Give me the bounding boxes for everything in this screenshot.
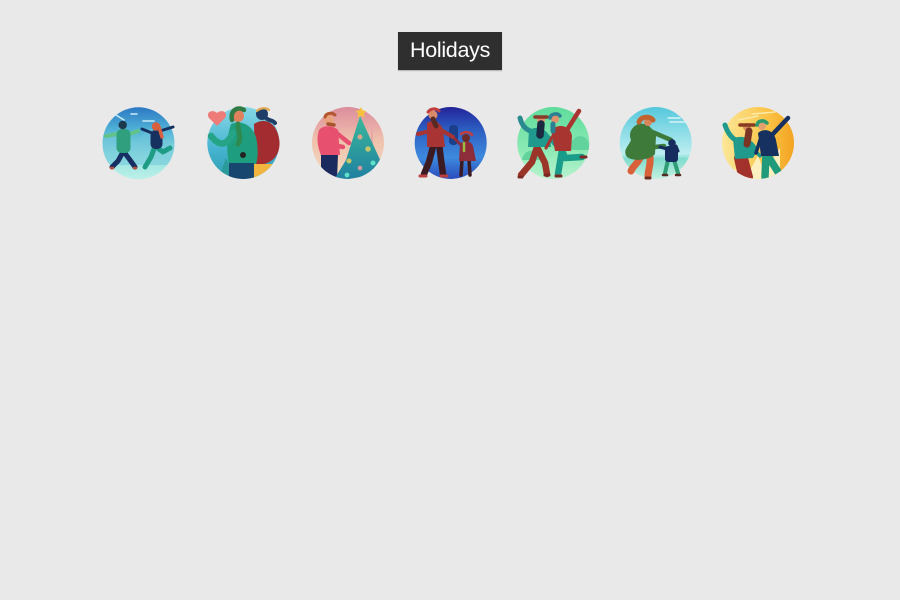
second dancer xyxy=(546,111,586,176)
star xyxy=(356,107,366,118)
tree xyxy=(336,116,380,179)
man in green coat xyxy=(211,108,258,180)
mother xyxy=(625,117,671,178)
icon: mother and child skating xyxy=(620,107,692,179)
title: Holidays xyxy=(410,38,490,62)
icon: two friends dancing at sunset xyxy=(722,107,794,179)
man xyxy=(418,109,453,176)
woman in red coat xyxy=(252,108,280,179)
bearded man xyxy=(519,116,555,177)
icon: couple with heart balloon xyxy=(207,107,280,180)
icon: two friends dancing on green xyxy=(517,107,589,179)
second dancer xyxy=(756,118,788,177)
bearded man xyxy=(725,123,760,177)
child xyxy=(455,132,476,175)
icon: father and child at night xyxy=(415,107,487,179)
illustration row xyxy=(102,106,794,180)
icon: man decorating Christmas tree xyxy=(312,107,384,181)
man xyxy=(318,113,349,179)
child xyxy=(660,139,680,175)
title xyxy=(398,32,502,70)
heart balloon xyxy=(208,111,226,126)
icon: couple ice skating on blue sky xyxy=(102,107,175,179)
